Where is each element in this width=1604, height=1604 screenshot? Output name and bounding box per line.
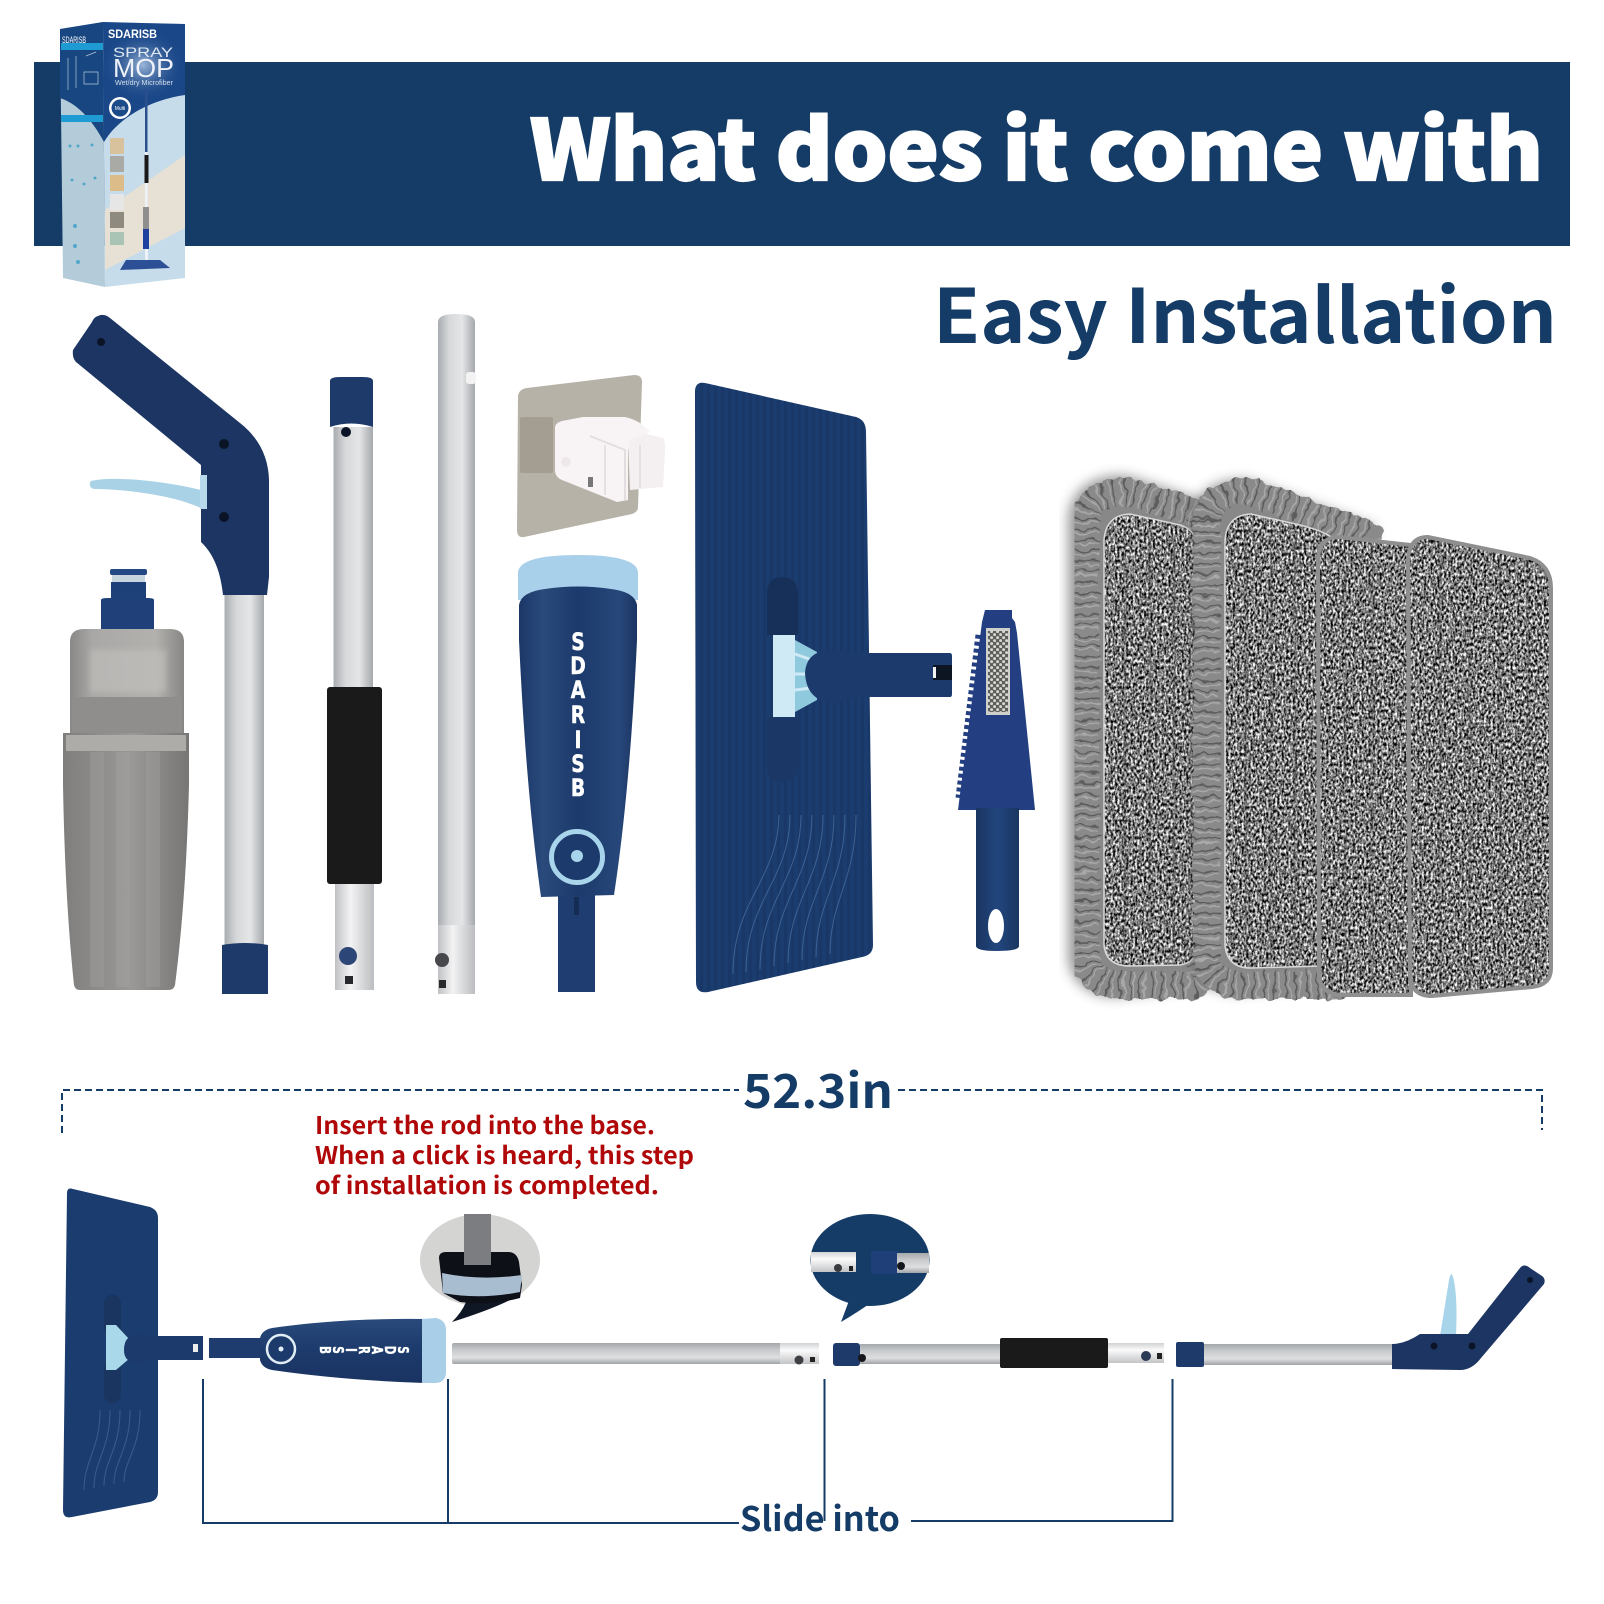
brand text: rotated: R xyxy=(354,1346,372,1354)
assembly: middle rod with foam grip xyxy=(833,1338,1164,1368)
product box xyxy=(60,22,185,287)
part: cleaning brush xyxy=(958,610,1035,951)
product box: Multi xyxy=(115,106,125,112)
red instruction text: When a click is heard, this step xyxy=(315,1136,694,1171)
label: 52.3in: 52.3in xyxy=(743,1053,893,1122)
red instruction text: of installation is completed. xyxy=(315,1166,659,1201)
product box: MOP xyxy=(113,53,174,83)
part: chenille mop pad 1 xyxy=(1082,490,1200,986)
callout bubble: base close-up xyxy=(420,1214,540,1322)
brand text: rotated: D xyxy=(380,1346,398,1355)
part: handle with trigger xyxy=(73,315,269,994)
assembly: sprayer body xyxy=(209,1318,446,1383)
brand text: rotated: S xyxy=(328,1346,346,1354)
product box: SDARISB xyxy=(108,27,157,41)
brand text: rotated: A xyxy=(367,1346,385,1354)
brand text: vertical: B xyxy=(571,775,585,803)
part: chenille mop pad 2 xyxy=(1203,490,1368,986)
brand text: rotated: I xyxy=(341,1348,359,1352)
header banner xyxy=(34,62,1570,246)
red instruction text: Insert the rod into the base. xyxy=(315,1106,655,1141)
title: what does it come with: What does it come with xyxy=(530,84,1543,204)
heading: easy installation: Easy Installation xyxy=(933,256,1557,365)
total length dashed dimension line xyxy=(62,1090,1542,1133)
label: slide into: Slide into xyxy=(740,1492,900,1541)
product box: Wet/dry Microfiber xyxy=(115,80,174,87)
assembly: mop plate with connector xyxy=(63,1188,203,1517)
assembly: long silver rod xyxy=(452,1343,819,1364)
part: sprayer body xyxy=(518,555,638,992)
part: flat mop plate xyxy=(695,383,952,992)
brand text: vertical: R xyxy=(571,702,586,730)
brand text: vertical: I xyxy=(575,727,581,755)
brand text: vertical: A xyxy=(571,677,586,705)
brand text: vertical: S xyxy=(571,751,585,779)
red instruction text xyxy=(315,1106,694,1201)
part: flat microfiber pad 3 xyxy=(1318,537,1411,995)
part: long silver rod xyxy=(435,314,476,994)
product box: SPRAY xyxy=(113,44,174,60)
slide-into bracket lines xyxy=(203,1379,1172,1523)
brand text: vertical: D xyxy=(570,653,586,681)
assembly: handle with trigger xyxy=(1176,1266,1545,1370)
part: middle rod with foam grip xyxy=(327,377,382,990)
brand text: vertical: S xyxy=(571,629,585,657)
brand text: rotated: B xyxy=(315,1346,333,1354)
part: wall mount clip xyxy=(517,375,665,537)
callout bubble: rod joint close-up xyxy=(810,1214,930,1322)
brand text: rotated: S xyxy=(393,1346,411,1354)
part: flat microfiber pad 4 xyxy=(1408,537,1551,996)
product box: SDARISB xyxy=(62,35,86,45)
part: water bottle xyxy=(63,569,189,990)
